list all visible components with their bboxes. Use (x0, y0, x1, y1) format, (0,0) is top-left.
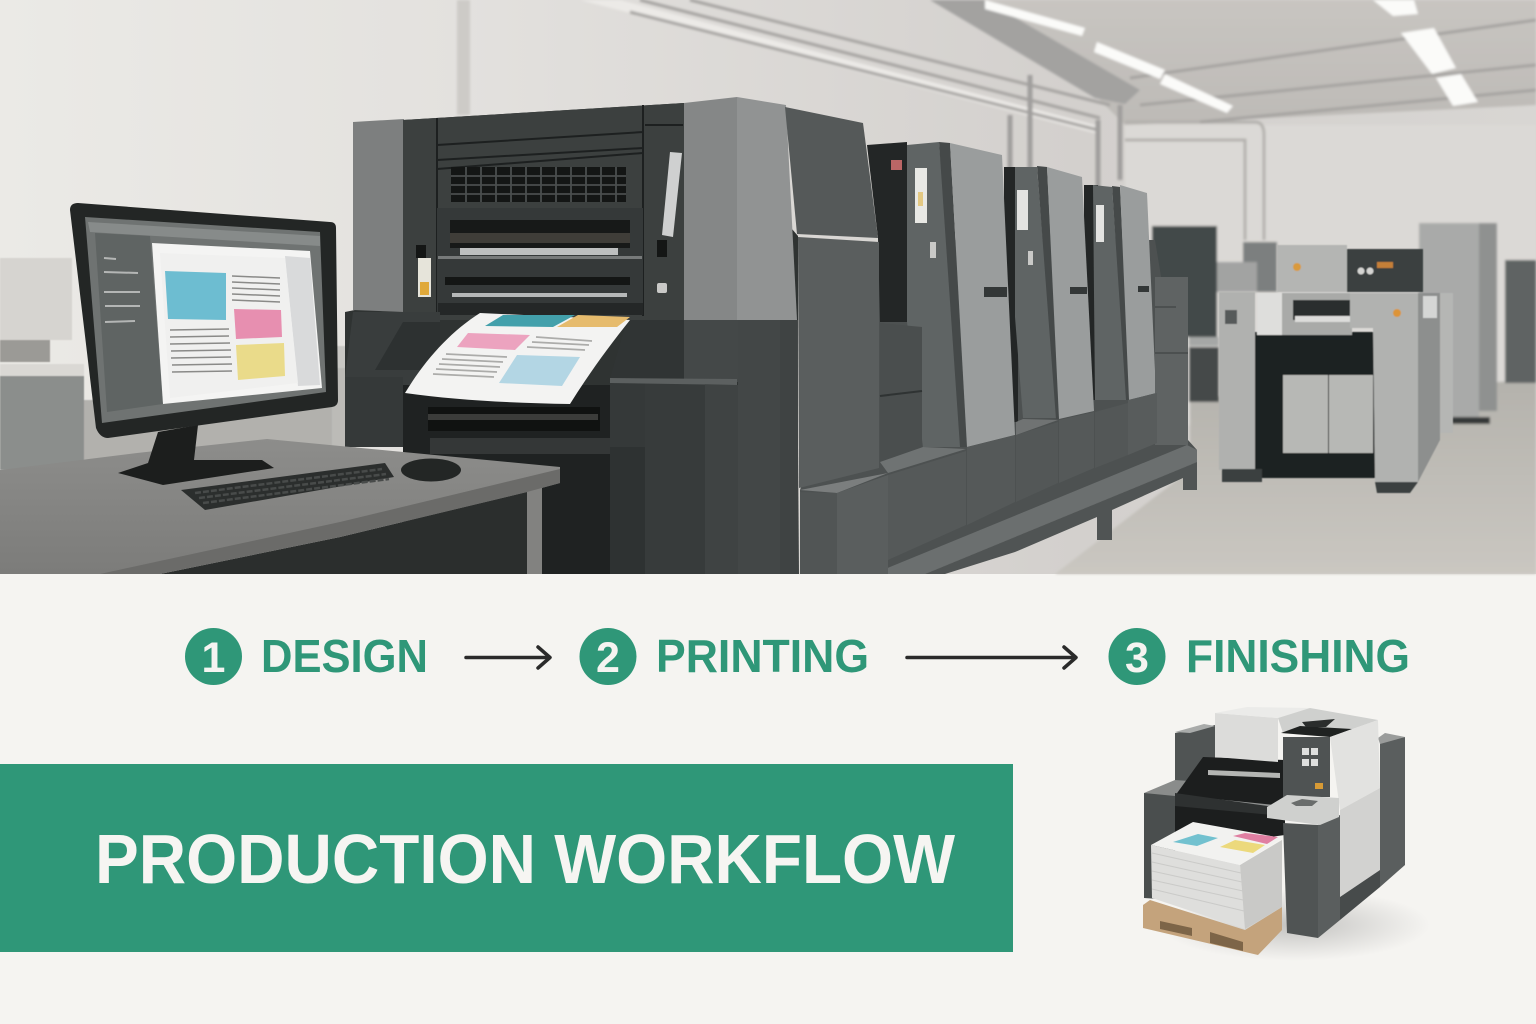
press unit 4 (1084, 185, 1188, 445)
monitor (70, 203, 338, 485)
pedestal (1283, 823, 1318, 938)
step 3 badge (1108, 628, 1166, 685)
workflow step 2: printing (580, 628, 869, 685)
step 3 label: FINISHING (1186, 630, 1410, 682)
base blocks and step platform (800, 393, 1197, 574)
ventilation grille (451, 167, 626, 202)
tray shelf (1267, 795, 1339, 825)
press unit 3 (1004, 166, 1094, 422)
wooden pallet (1143, 900, 1282, 955)
step 1 number: 1 (202, 634, 225, 682)
background finishing machine (1219, 245, 1453, 493)
left columns (1175, 725, 1215, 782)
right column (1380, 737, 1405, 887)
keyboard (181, 463, 394, 510)
workflow step 1: design (185, 628, 428, 685)
arrow: design to printing (466, 647, 550, 668)
left background counters (0, 258, 356, 470)
title banner (0, 764, 1013, 952)
stacked paper (1151, 845, 1245, 929)
step 3 number: 3 (1125, 634, 1149, 682)
print opening (1175, 757, 1285, 850)
press unit 2 (867, 142, 1015, 462)
printed sheet (405, 313, 630, 404)
step 2 label: PRINTING (656, 630, 869, 682)
main press body (345, 97, 879, 574)
desk (0, 439, 560, 574)
factory background (457, 0, 1536, 574)
white housing (1330, 720, 1380, 810)
arrow: printing to finishing (907, 647, 1076, 668)
title: PRODUCTION WORKFLOW (95, 820, 955, 898)
top cover (1215, 713, 1278, 762)
step 2 number: 2 (596, 634, 620, 682)
icon: small finishing machine with stacked paper (1143, 707, 1430, 961)
control panel (1283, 737, 1330, 797)
step 1 badge (185, 628, 242, 685)
step 1 label: DESIGN (261, 630, 428, 682)
photo: print shop (0, 0, 1536, 574)
mouse (401, 458, 461, 482)
workflow step 3: finishing (1108, 628, 1410, 685)
press backing (800, 240, 1197, 574)
step 2 badge (580, 628, 636, 685)
